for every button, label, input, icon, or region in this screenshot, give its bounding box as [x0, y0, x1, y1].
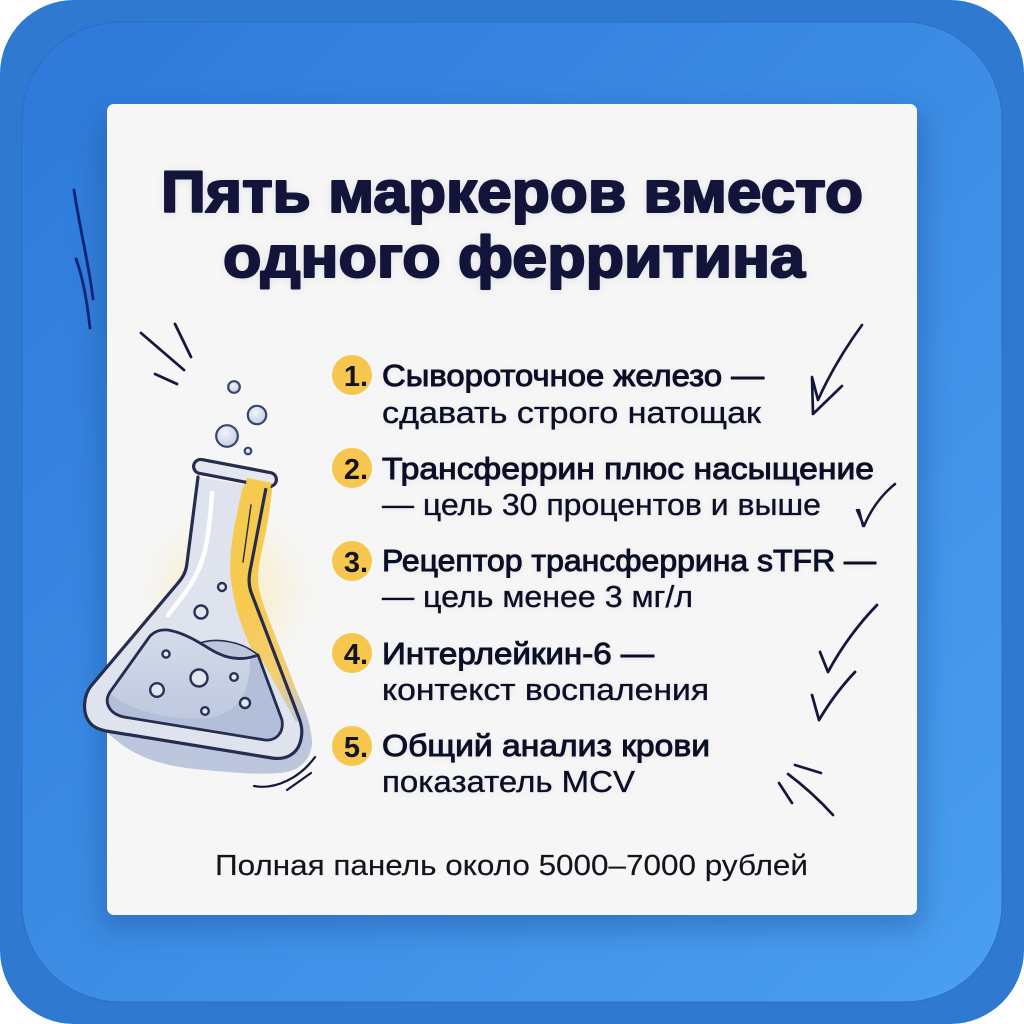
- item 4 text: Интерлейкин-6 —: [382, 636, 654, 671]
- number badge 3: [332, 541, 372, 581]
- item 1 text: сдавать строго натощак: [382, 395, 761, 430]
- icon: laboratory flask with bubbles: [85, 381, 312, 774]
- liquid darker shade: [108, 655, 282, 740]
- item 4: [332, 633, 709, 707]
- white card: [107, 104, 917, 915]
- item 1 text: [382, 358, 764, 430]
- item 4 text: [382, 636, 709, 707]
- flask yellow band: [230, 478, 305, 722]
- item 5: [332, 726, 710, 799]
- flask yellow glow: [166, 532, 290, 648]
- number badge 4: [332, 633, 372, 673]
- item 3 text: — цель менее 3 мг/л: [382, 579, 693, 614]
- card shadow: [100, 112, 924, 930]
- number badge 2: 2.: [344, 454, 368, 486]
- item 3 text: [382, 543, 876, 614]
- flask liquid: [107, 630, 282, 740]
- item 2 text: Трансферрин плюс насыщение: [382, 451, 874, 486]
- item 3: [332, 541, 876, 614]
- liquid back surface: [200, 641, 258, 660]
- doodle: motion lines under flask: [254, 757, 315, 790]
- flask highlight: [168, 493, 212, 615]
- rising bubbles: [216, 381, 266, 454]
- flask outlines: [85, 458, 302, 758]
- doodle: sparks above flask: [141, 324, 191, 384]
- item 1: [332, 355, 764, 430]
- doodle: strokes on left of card: [74, 190, 93, 328]
- number badge 3: 3.: [344, 547, 368, 579]
- item 3 text: Рецептор трансферрина sTFR —: [382, 543, 876, 578]
- number badge 5: [332, 726, 372, 766]
- item 2 text: — цель 30 процентов и выше: [382, 487, 821, 522]
- item 2 text: [382, 451, 874, 522]
- item 5 text: [382, 728, 710, 799]
- icon: check mark 3: [820, 605, 877, 672]
- flask ground shadow: [100, 690, 312, 774]
- icon: check mark 1: [812, 325, 862, 414]
- flask glass body: [85, 477, 302, 758]
- number badge 5: 5.: [344, 732, 368, 764]
- item 4 text: контекст воспаления: [382, 672, 709, 707]
- item 1 text: Сывороточное железо —: [382, 358, 764, 393]
- rim yellow tint: [246, 478, 272, 489]
- number badge 1: [332, 355, 372, 395]
- title: Пять маркеров вместо: [161, 160, 863, 225]
- number badge 4: 4.: [344, 639, 368, 671]
- doodle: sparks lower right: [779, 765, 833, 815]
- title: [161, 160, 863, 290]
- item 2: [332, 448, 874, 522]
- number badge 1: 1.: [344, 361, 368, 393]
- icon: check mark 4: [812, 672, 855, 720]
- item 5 text: показатель MCV: [382, 764, 635, 799]
- footer note: Полная панель около 5000–7000 рублей: [215, 850, 808, 882]
- title: одного ферритина: [223, 225, 806, 290]
- icon: check mark 2: [857, 484, 895, 526]
- item 5 text: Общий анализ крови: [382, 728, 710, 763]
- number badge 2: [332, 448, 372, 488]
- inner bubbles: [150, 583, 250, 715]
